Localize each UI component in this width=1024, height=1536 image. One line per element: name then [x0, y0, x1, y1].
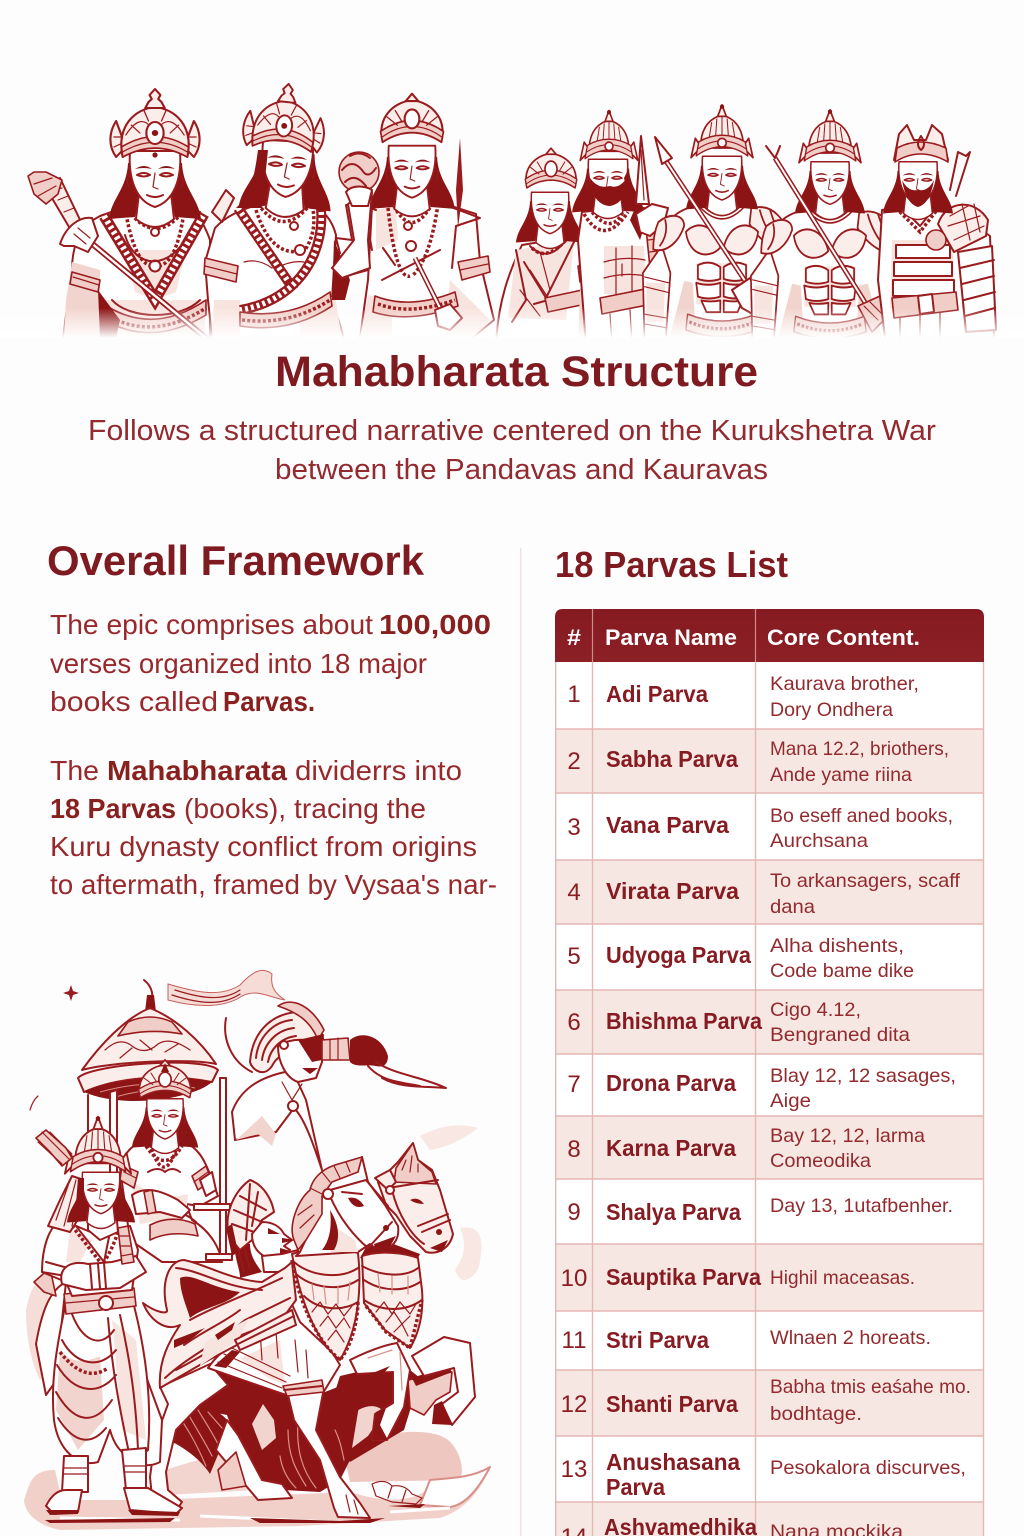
table grid [555, 662, 984, 1536]
row 6: 6 [567, 1009, 581, 1036]
rocks [372, 1481, 422, 1504]
row 4: To arkansagers, scaff [770, 870, 961, 892]
text block: first paragraph [50, 609, 491, 717]
row 2: Sabha Parva [606, 746, 738, 772]
table row shading [555, 662, 984, 1536]
heading: 18 Parvas list: 18 Parvas List [555, 544, 788, 585]
row 4: dana [770, 896, 815, 918]
row 10: Highil maceasas. [770, 1267, 915, 1289]
horse: rear horse [326, 1143, 475, 1462]
row 8: Bay 12, 12, larma [770, 1125, 925, 1147]
text block: first paragraph: books called [50, 686, 218, 717]
row 4: Virata Parva [606, 878, 739, 904]
table: 18 Parvas list [555, 544, 984, 1536]
horse: front horse [150, 1157, 398, 1518]
row 3 [567, 805, 953, 852]
figure: warrior holding orb [332, 94, 494, 338]
row 2 [567, 738, 949, 786]
table header: Core Content. [767, 625, 920, 650]
chariot canopy and flag [30, 970, 285, 1258]
text block: first paragraph: 100,000 [379, 609, 491, 640]
figure: seated king in chariot [120, 1060, 232, 1262]
hero fade [62, 309, 997, 338]
star [63, 985, 79, 1001]
table header: # [567, 625, 581, 650]
figure: veteran warrior in layered armour [878, 125, 996, 345]
text block: second paragraph [50, 755, 497, 900]
row 9: 9 [567, 1199, 581, 1226]
text block: first paragraph: The epic comprises about [50, 609, 373, 640]
figure: armoured warrior with spear [642, 104, 782, 337]
divider [520, 548, 522, 1536]
text block: second paragraph: Kuru dynasty conflict from origins [50, 831, 477, 862]
row 7: Blay 12, 12 sasages, [770, 1065, 956, 1087]
figure: queen [496, 147, 584, 337]
text block: second paragraph: Mahabharata [107, 755, 287, 786]
row 7: Drona Parva [606, 1070, 736, 1096]
flowing scarf [143, 1260, 296, 1388]
text block: second paragraph: dividerrs into [295, 755, 462, 786]
text block: second paragraph: (books), tracing the [184, 793, 426, 824]
row 3: 3 [567, 814, 581, 841]
row 2: Mana 12.2, briothers, [770, 738, 949, 760]
text block: second paragraph: to aftermath, framed by Vysaa's nar- [50, 869, 497, 900]
row 12: bodhtage. [770, 1403, 862, 1425]
subtitle: between the Pandavas and Kauravas [275, 454, 768, 486]
table header [555, 609, 984, 662]
row 14 [561, 1514, 903, 1536]
row 13: 13 [561, 1456, 587, 1483]
row 3: Bo eseff aned books, [770, 805, 953, 827]
row 12 [561, 1376, 971, 1425]
row 6: Cigo 4.12, [770, 999, 861, 1021]
row 9: Shalya Parva [606, 1199, 741, 1225]
row 6 [567, 999, 910, 1046]
row 5: 5 [567, 943, 581, 970]
illustration: row of Mahabharata heroes [27, 82, 997, 336]
figure: charioteer [226, 1180, 298, 1278]
row 2: 2 [567, 748, 581, 775]
row 13: Parva [606, 1474, 665, 1500]
row 7 [567, 1065, 956, 1112]
row 5: Code bame dike [770, 960, 914, 982]
row 8: Karna Parva [606, 1135, 736, 1161]
row 1: 1 [567, 681, 581, 708]
text block: first paragraph: Parvas. [223, 686, 315, 717]
row 5: Udyoga Parva [606, 942, 751, 968]
row 10: Sauptika Parva [606, 1264, 761, 1290]
ground strokes [45, 1504, 425, 1523]
row 10 [561, 1264, 915, 1292]
row 11: 11 [562, 1327, 586, 1354]
figure: standing warrior with bow quiver [34, 1116, 182, 1516]
row 10: 10 [561, 1265, 587, 1292]
row 1: Dory Ondhera [770, 699, 893, 721]
row 1: Kaurava brother, [770, 673, 919, 695]
illustration: Kurukshetra chariot scene [24, 970, 490, 1530]
row 1: Adi Parva [606, 681, 708, 707]
figure: messenger with plume [225, 1002, 446, 1170]
row 13: Pesokalora discurves, [770, 1457, 966, 1479]
figure: bearded warrior with sword [572, 110, 670, 345]
row 7: 7 [567, 1071, 581, 1098]
row 7: Aige [770, 1090, 811, 1112]
row 3: Aurchsana [770, 830, 868, 852]
background wash [24, 1125, 490, 1530]
figure: king with mace [28, 89, 210, 338]
row 8: 8 [567, 1136, 581, 1163]
title: Mahabharata Structure [275, 348, 758, 396]
row 8: Comeodika [770, 1150, 871, 1172]
row 11: Stri Parva [606, 1327, 709, 1353]
row 12: Babha tmis eaśahe mo. [770, 1376, 971, 1398]
subtitle: Follows a structured narrative centered on the Kurukshetra War [88, 415, 936, 447]
row 11 [562, 1327, 931, 1354]
text block: first paragraph: verses organized into 18 major [50, 648, 427, 679]
row 1 [567, 673, 919, 721]
row 4: 4 [567, 879, 581, 906]
row 11: Wlnaen 2 horeats. [770, 1327, 931, 1349]
heading: overall framework: Overall Framework [47, 537, 425, 584]
row 8 [567, 1125, 925, 1172]
row 5 [567, 935, 914, 982]
row 6: Bengraned dita [770, 1024, 910, 1046]
row 13: Anushasana [606, 1449, 740, 1475]
subtitle [88, 415, 936, 486]
row 6: Bhishma Parva [606, 1008, 762, 1034]
figure: bare-chested hero [204, 80, 368, 338]
figure: armoured warrior with trident [750, 109, 882, 337]
text block: second paragraph: The [50, 755, 99, 786]
row 12: 12 [561, 1391, 587, 1418]
row 4 [567, 870, 961, 918]
row 9: Day 13, 1utafbenher. [770, 1195, 953, 1217]
text block: second paragraph: 18 Parvas [50, 793, 176, 824]
row 2: Ande yame riina [770, 764, 912, 786]
row 3: Vana Parva [606, 812, 729, 838]
row 12: Shanti Parva [606, 1391, 738, 1417]
table header: Parva Name [605, 625, 737, 650]
row 9 [567, 1195, 953, 1226]
row 5: Alha dishents, [770, 935, 904, 957]
row 13 [561, 1449, 966, 1500]
